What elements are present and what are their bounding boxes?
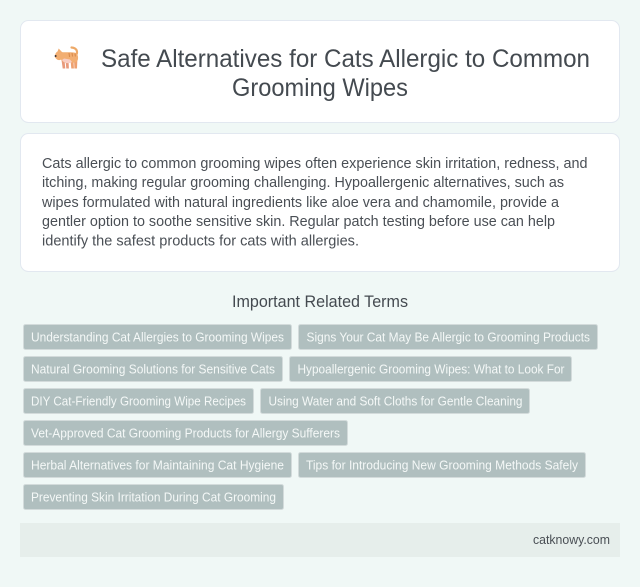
panel: description text: itching, making regular grooming challenging. Hypoallergenic alternatives, such as <box>42 175 564 191</box>
title: Grooming Wipes <box>232 74 408 102</box>
title: Safe Alternatives for Cats Allergic to Common <box>101 45 590 73</box>
panel: description text: Cats allergic to common grooming wipes often experience skin irritation, redness, and <box>42 156 588 172</box>
panel: description text: wipes formulated with natural ingredients like aloe vera and chamomile, provide a <box>41 195 560 211</box>
tag: water and soft cloths: Using Water and Soft Cloths for Gentle Cleaning <box>268 394 523 408</box>
panel: description text <box>20 134 620 272</box>
tag: herbal alternatives: Herbal Alternatives for Maintaining Cat Hygiene <box>31 458 284 472</box>
related terms tags <box>24 324 598 510</box>
heading: important related terms: Important Related Terms <box>232 293 408 311</box>
tag: DIY recipes: DIY Cat-Friendly Grooming Wipe Recipes <box>31 394 246 408</box>
tag: vet-approved products: Vet-Approved Cat Grooming Products for Allergy Sufferers <box>31 426 340 440</box>
tag: vet-approved products <box>24 420 348 446</box>
tag: preventing irritation: Preventing Skin Irritation During Cat Grooming <box>31 490 276 504</box>
title <box>101 45 590 102</box>
tag: understanding allergies <box>24 324 292 350</box>
icon: cat <box>55 48 78 68</box>
tag: hypoallergenic wipes <box>290 356 572 382</box>
tag: water and soft cloths <box>260 388 530 414</box>
tag: natural solutions <box>24 356 282 382</box>
footer: catknowy.com <box>533 533 610 547</box>
tag: signs of allergy <box>298 324 598 350</box>
tag: signs of allergy: Signs Your Cat May Be Allergic to Grooming Products <box>306 330 590 344</box>
tag: DIY recipes <box>24 388 254 414</box>
footer <box>20 523 620 557</box>
tag: hypoallergenic wipes: Hypoallergenic Grooming Wipes: What to Look For <box>298 362 564 376</box>
tag: preventing irritation <box>24 484 284 510</box>
tag: introducing new methods <box>298 452 586 478</box>
tag: understanding allergies: Understanding Cat Allergies to Grooming Wipes <box>31 330 284 344</box>
panel: description text: gentler option to soothe sensitive skin. Regular patch testing before use can help <box>42 214 555 230</box>
panel: description text: identify the safest products for cats with allergies. <box>42 234 359 250</box>
panel: title card <box>20 20 620 122</box>
tag: introducing new methods: Tips for Introducing New Grooming Methods Safely <box>306 458 579 472</box>
tag: natural solutions: Natural Grooming Solutions for Sensitive Cats <box>31 362 275 376</box>
tag: herbal alternatives <box>24 452 292 478</box>
